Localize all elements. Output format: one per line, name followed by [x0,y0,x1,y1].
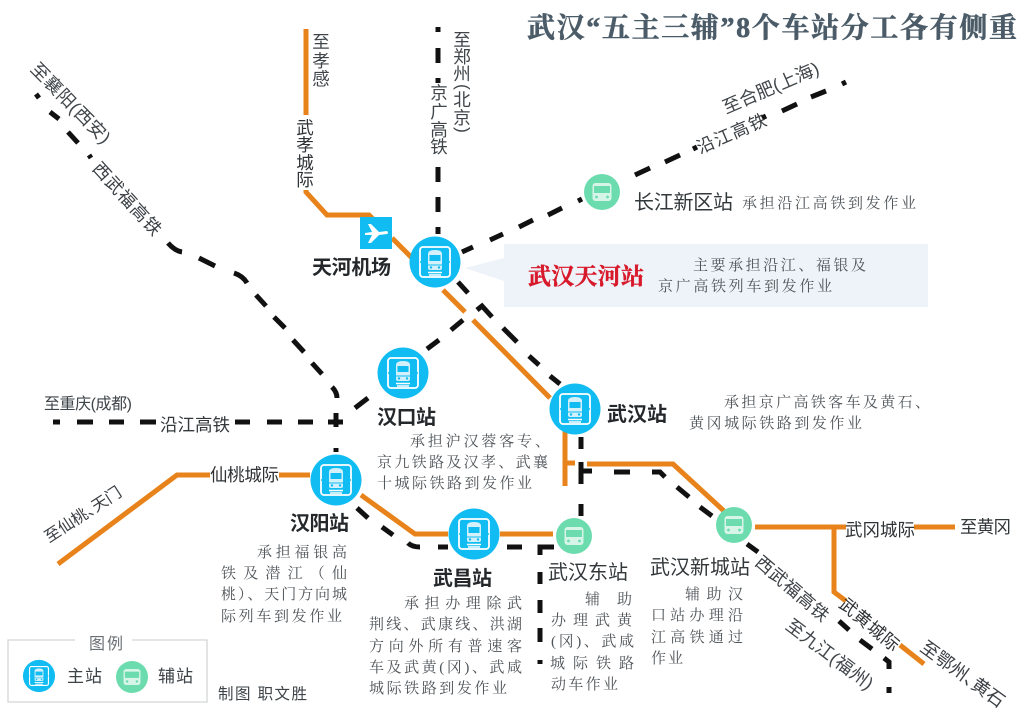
Hanyang description: 桃）、天门方向城 [221,585,347,603]
line label: Wuhan-Xiaogan intercity: 武孝城际 [296,118,314,190]
Wuhan station description: 黄冈城际铁路到发作业 [689,414,862,432]
title: 武汉“五主三辅”8个车站分工各有侧重 [527,12,1017,44]
Wuhan Xincheng label: 武汉新城站 [650,556,750,579]
Changjiang New Area description: 承担沿江高铁到发作业 [742,194,916,212]
line label: Yangtze River HSR west: 沿江高铁 [160,415,230,435]
station: Wuhan Xincheng [716,507,752,543]
Wuhan East description: 动车作业 [551,676,618,693]
Wuhan East description: 城际铁路 [550,655,634,672]
line label: to Hefei (Shanghai): 至合肥(上海) [720,58,822,118]
line label: Xi-Wu-Fu HSR lower: 西武福高铁 [751,552,833,625]
credit: 制图 职文胜 [218,685,307,703]
Hankou label: 汉口站 [377,406,436,429]
Wuhan East description: 办理武黄 [551,611,633,629]
station: Hanyang [310,454,362,506]
Wuhan East label: 武汉东站 [548,561,628,584]
Wuhan station description [689,393,930,432]
Hanyang description: 铁及潜江（仙 [221,565,347,582]
Wuchang description: 方向外所有普速客 [369,637,522,655]
line label: Xi-Wu-Fu HSR upper: 西武福高铁 [89,158,165,240]
Hankou description: 承担沪汉蓉客专、 [410,432,550,450]
Hankou description: 十城际铁路到发作业 [377,475,532,492]
Wuchang description: 城际铁路到发作业 [369,680,507,697]
legend icon: main station [23,660,55,692]
Wuchang description: 荆线、武康线、洪湖 [369,615,522,633]
black dashed high-speed rail lines [36,27,889,693]
Wuchang description [369,595,522,697]
legend auxiliary station label: 辅站 [158,667,193,686]
line label: to Xiangyang (Xi'an): 至襄阳(西安) [27,59,115,148]
legend main station label: 主站 [67,667,102,686]
station: Changjiang New Area [584,174,620,210]
Wuhan Xincheng description: 口站办理沿 [651,607,743,624]
Hanyang label: 汉阳站 [290,512,349,535]
Hankou description [377,432,550,492]
station: Wuhan Tianhe [410,236,460,288]
legend [8,635,207,702]
line label: to Zhengzhou (Beijing): ( [453,84,473,90]
line label: to Ezhou, Huangshi: 至鄂州、黄石 [917,637,1008,711]
line label: Wuhan-Huanggang intercity: 武冈城际 [845,520,915,540]
station: Wuchang [448,508,500,560]
Wuhan East description [550,591,634,693]
line label: Beijing-Guangzhou HSR: 京广高铁 [430,83,448,157]
callout station name: 武汉天河站 [528,264,644,289]
callout description: 主要承担沿江、福银及 [693,257,866,274]
Changjiang New Area label: 长江新区站 [634,191,733,214]
Wuchang label: 武昌站 [433,567,492,590]
icon: airport [360,217,392,249]
Wuchang description: 承担办理除武 [404,595,522,612]
line label: to Chongqing (Chengdu): 至重庆(成都) [44,395,132,413]
Wuhan East description: (冈)、武咸 [551,633,634,650]
line label: to Zhengzhou (Beijing) [453,30,473,133]
line label: to Zhengzhou (Beijing): ) [453,127,473,133]
Hanyang description: 承担福银高 [257,543,347,561]
Wuhan Xincheng description [651,586,743,667]
Hanyang description: 际列车到发作业 [221,608,342,625]
Wuhan Xincheng description: 辅助汉 [685,586,743,603]
legend icon: auxiliary station [116,661,148,693]
orange intercity rail lines [58,29,955,664]
line label: Xiantao intercity: 仙桃城际 [210,465,279,485]
Wuhan Xincheng description: 江高铁通过 [651,628,743,646]
station: Wuhan [550,384,600,434]
Hankou description: 京九铁路及汉孝、武襄 [377,453,548,471]
line label: to Xiaogan: 至孝感 [312,32,330,89]
line label: to Zhengzhou (Beijing): 北京 [453,90,471,128]
Wuhan Xincheng description: 作业 [651,650,683,667]
line label: to Zhengzhou (Beijing): 至郑州 [453,30,471,84]
station: Hankou [378,348,428,398]
line label: to Xiantao, Tianmen: 至仙桃、天门 [41,483,125,546]
Wuhan station description: 承担京广高铁客车及黄石、 [724,393,930,411]
Wuhan East description: 辅助 [585,591,632,608]
callout description: 京广高铁列车到发作业 [658,277,832,295]
Hanyang description [221,543,347,625]
station: Wuhan East [556,518,592,554]
Wuhan station label: 武汉站 [607,403,667,426]
callout panel: Wuhan Tianhe station [465,244,928,307]
legend title: 图例 [89,635,123,653]
line label: Wuhan-Huangshi intercity: 武黄城际 [835,594,903,655]
label: Tianhe airport: 天河机场 [312,256,391,279]
Wuchang description: 车及武黄(冈)、武咸 [369,658,522,676]
line label: to Jiujiang (Fuzhou): 至九江(福州) [782,615,877,694]
callout description [658,257,866,295]
line label: Yangtze River HSR northeast: 沿江高铁 [694,110,769,158]
line label: to Huanggang: 至黄冈 [960,517,1011,537]
